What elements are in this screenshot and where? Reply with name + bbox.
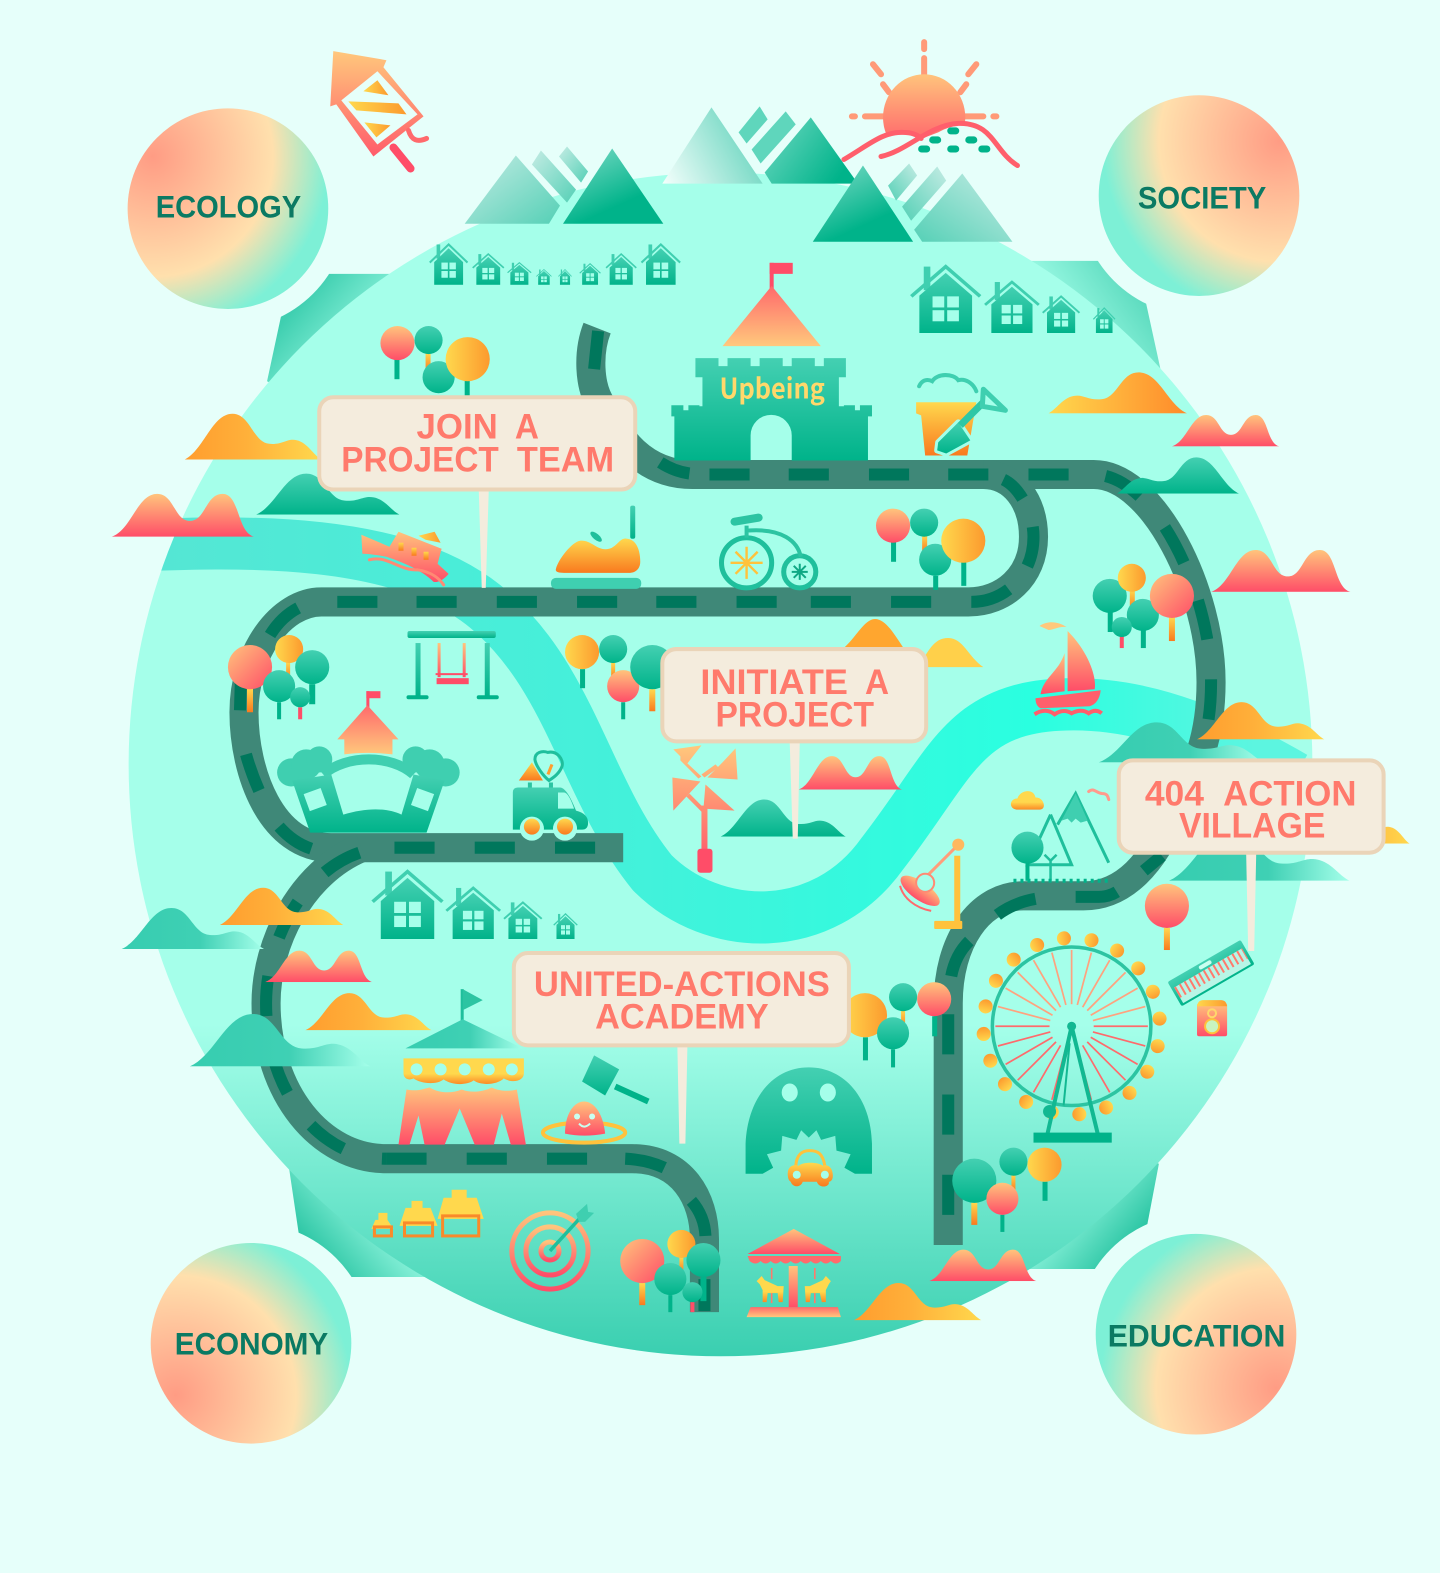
monster: [746, 1067, 872, 1174]
toy car: [788, 1151, 833, 1187]
ship on river: [361, 532, 449, 585]
hills: teal: [122, 457, 1350, 1066]
sign: united-actions academy: [514, 953, 849, 1144]
hills: red: [112, 415, 1351, 1281]
whack-a-mole hammer: [582, 1055, 648, 1102]
river: [101, 543, 1294, 917]
road network: [240, 328, 1211, 1312]
pinwheel: [672, 745, 738, 873]
badge: education: [1096, 1234, 1296, 1435]
mountains: left group: [465, 146, 663, 224]
sign: united-actions academy: ACADEMY: [595, 997, 769, 1036]
sign: join a project team: PROJECT: [341, 440, 499, 479]
houses: top left row: [430, 244, 680, 285]
sign: 404 action village: ACTION: [1223, 775, 1357, 814]
sign: initiate a project: A: [865, 663, 889, 702]
tree cluster 8: [620, 1230, 721, 1312]
badge: economy: ECONOMY: [175, 1326, 329, 1361]
ferris wheel: [968, 923, 1175, 1143]
rocket: [330, 51, 427, 169]
mini yellow houses: [371, 1190, 484, 1236]
main circular land: [129, 173, 1312, 1356]
carousel: [747, 1229, 841, 1317]
tree cluster 1: [380, 326, 490, 397]
sign: initiate a project: PROJECT: [715, 695, 875, 734]
bouncy castle: [277, 691, 460, 833]
penny-farthing bicycle: [722, 518, 816, 588]
badge: education: EDUCATION: [1108, 1318, 1285, 1353]
mountains: centre group: [662, 106, 858, 184]
speaker: [1197, 1000, 1227, 1036]
sign: join a project team: [319, 397, 635, 588]
van: [513, 752, 588, 841]
hills: orange: [185, 372, 1410, 1320]
target with dart: [512, 1204, 594, 1289]
bumper car: [551, 506, 641, 589]
badge: ecology: [128, 108, 328, 309]
sign: initiate a project: INITIATE: [700, 663, 848, 702]
mountains: right group: [813, 164, 1012, 242]
sign: initiate a project: [662, 649, 926, 839]
sailboat: [1034, 622, 1102, 714]
swing set: [407, 631, 499, 699]
castle name: Upbeing: [719, 366, 825, 407]
circus tent: [398, 989, 526, 1145]
badge: ecology: ECOLOGY: [156, 190, 301, 225]
map corners: [108, 75, 1319, 1464]
sign: 404 action village: VILLAGE: [1179, 807, 1325, 846]
castle: Upbeing: [671, 263, 872, 460]
sun: [843, 42, 1018, 173]
keyboard: [1168, 940, 1255, 1006]
spinning saucer ride: [896, 839, 964, 929]
sign: join a project team: A: [515, 407, 539, 446]
badge: society: SOCIETY: [1138, 181, 1266, 216]
sign: united-actions academy: UNITED-ACTIONS: [534, 965, 830, 1004]
sign: 404 action village: 404: [1145, 775, 1205, 814]
bucket and shovel: [916, 375, 1005, 455]
tree cluster 4: [228, 635, 329, 719]
tree cluster 6: [843, 982, 951, 1067]
tree cluster 2: [876, 509, 985, 590]
houses: lower row: [373, 872, 577, 939]
houses: top right row: [911, 267, 1115, 333]
mole: [543, 1102, 625, 1143]
tree cluster 5: [565, 635, 674, 719]
sign: join a project team: JOIN: [417, 407, 498, 446]
single tree: [1145, 884, 1189, 950]
mountain scene icon: [1011, 794, 1109, 881]
badge: economy: [151, 1243, 351, 1444]
cloud and worm: [1011, 790, 1109, 810]
sign: 404 action village: [1119, 760, 1384, 951]
sign: join a project team: TEAM: [517, 440, 614, 479]
tree cluster 3: [1093, 564, 1194, 648]
badge: society: [1099, 95, 1299, 296]
tree cluster 7: [952, 1148, 1062, 1232]
